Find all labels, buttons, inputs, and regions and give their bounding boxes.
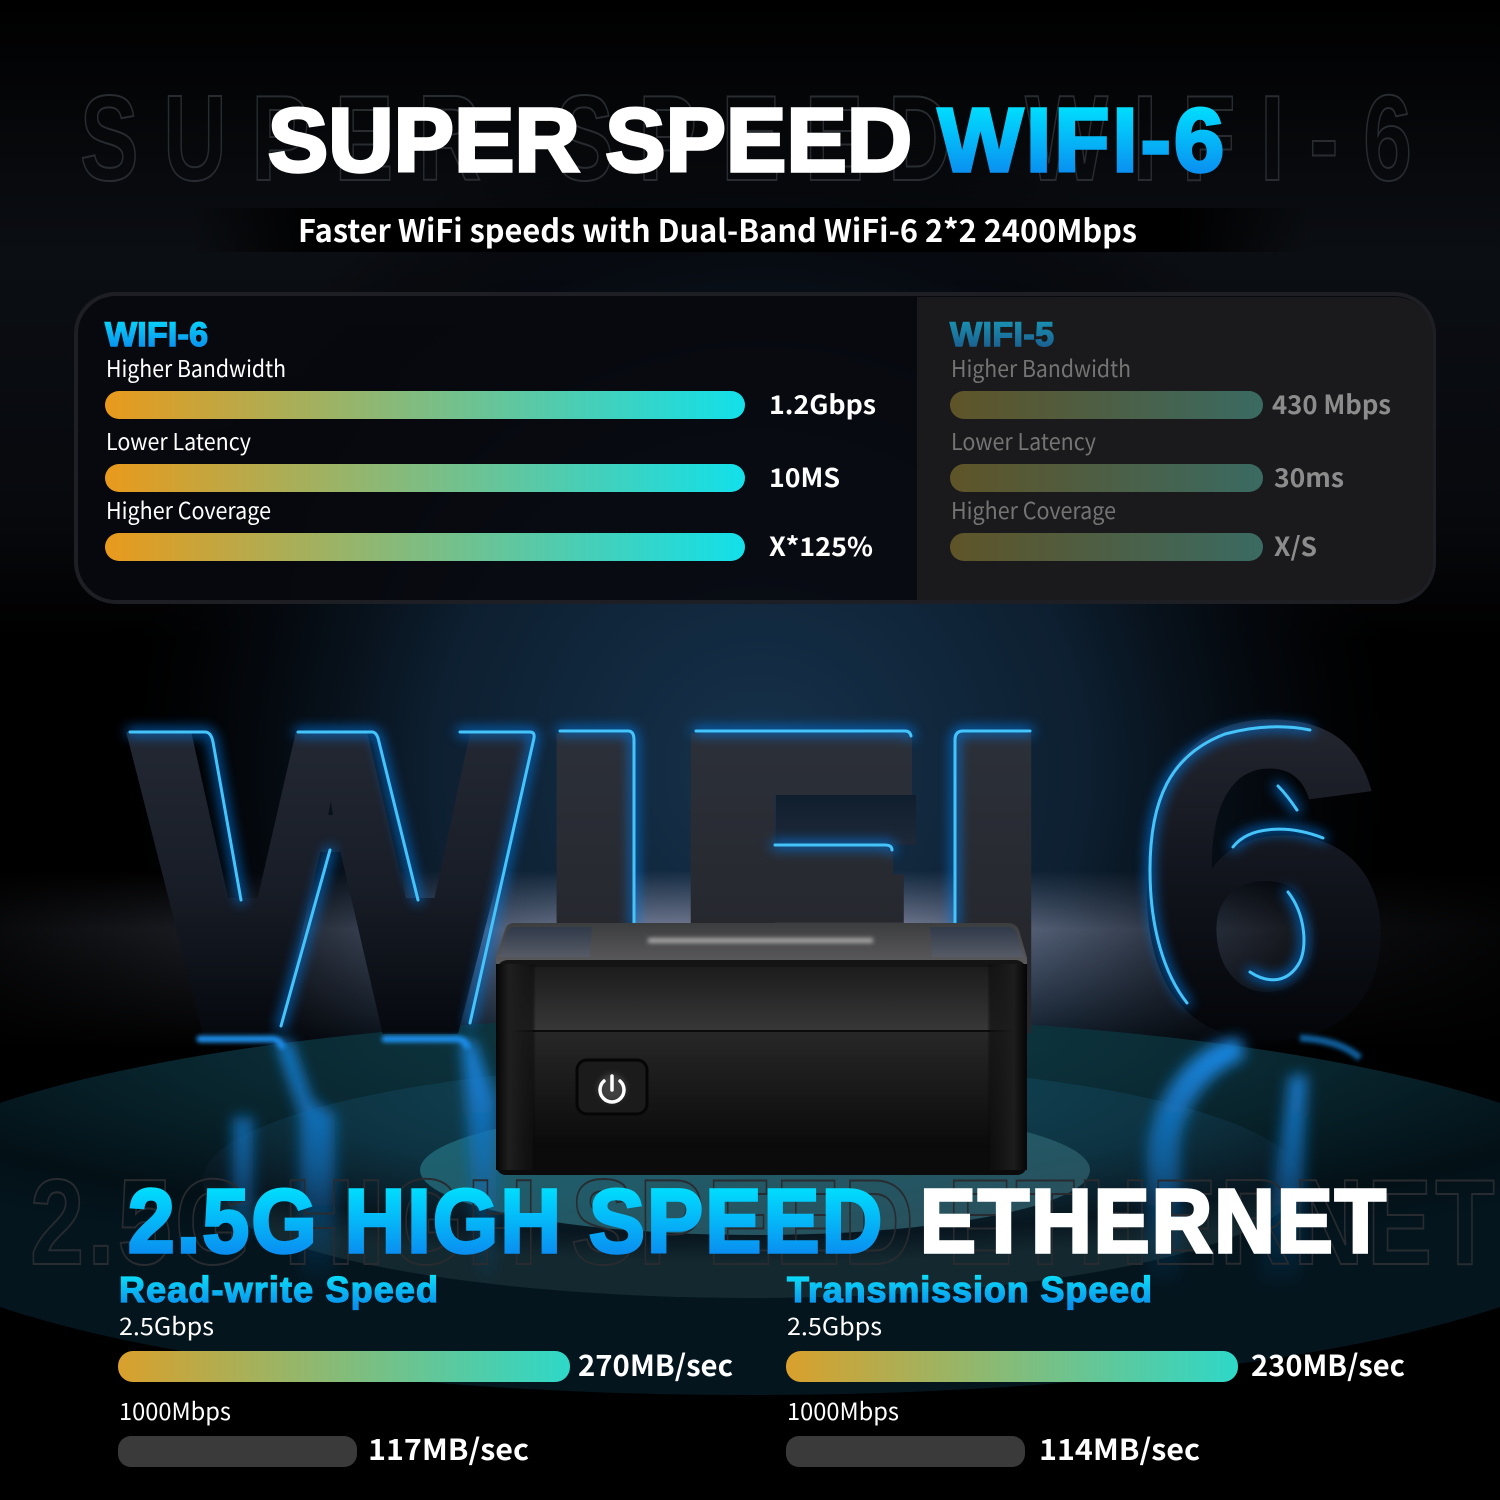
panel: transmission speed: 114MB/sec [1039,1427,1200,1469]
wifi-5 coverage row: Higher Coverage [951,492,1116,526]
panel: wifi comparison [76,294,1434,602]
wifi-5 latency row: 30ms [1274,458,1344,495]
panel: read-write speed [118,1269,733,1469]
neon sign: WIFI 6 letters: 6 [1129,626,1398,1133]
panel: transmission speed: 1000Mbps [787,1392,899,1427]
neon sign: WIFI 6 letters: F [662,638,924,1126]
wifi-5 latency row: Lower Latency [951,423,1096,457]
wifi-6 column [105,316,876,564]
wifi-6 heading: WIFI-6 [105,316,208,354]
coverage row: Higher Coverage [106,492,271,526]
platform rings [0,1015,1500,1395]
panel: read-write speed: 270MB/sec [578,1343,733,1385]
device top face [496,923,1027,966]
panel: read-write speed: 2.5Gbps [119,1307,214,1342]
power button [577,1060,647,1114]
latency row: Lower Latency [106,423,251,457]
panel: read-write speed: 1000Mbps [119,1392,231,1427]
read-write heading: Read-write Speed [119,1269,438,1310]
neon sign: WIFI 6 letters: I [919,639,1067,1126]
wifi-5 heading: WIFI-5 [950,316,1054,354]
wifi-5 coverage row: X/S [1274,527,1317,564]
neon reflections on the platform [200,1038,1360,1290]
upper shell [496,967,1027,1030]
panel: wifi-5 background [917,297,1433,600]
neon sign: WIFI 6 letters [127,626,1398,1133]
background [0,108,1500,1042]
title: 2.5g high speed ethernet: ETHERNET [920,1171,1386,1272]
bandwidth row: Higher Bandwidth [106,350,286,384]
top corner textures [499,927,1024,957]
title: super speed wifi-6 [268,91,1224,191]
F notch cut [776,795,916,882]
wifi-5 bandwidth row [950,350,1391,422]
mini pc device [496,923,1027,1175]
panel: read-write speed: 117MB/sec [368,1427,529,1469]
wifi-5 bandwidth row: Higher Bandwidth [951,350,1131,384]
icon: power [600,1076,624,1102]
panel: transmission speed [786,1269,1405,1469]
lower shell [496,1032,1027,1148]
transmission 2.5g bar [786,1351,1238,1382]
subtitle: Faster WiFi speeds with Dual-Band WiFi-6 2*2 2400Mbps [298,206,1137,251]
read-write 1000m bar [118,1436,357,1467]
title: super speed wifi-6: SUPER SPEED [268,91,912,191]
title: super speed wifi-6: WIFI-6 [938,91,1224,191]
F body bars [693,733,912,925]
latency row: 10MS [769,458,840,495]
ghost title outline: SUPER SPEED WIFI-6 [80,70,1412,206]
transmission 1000m bar [786,1436,1025,1467]
title: 2.5g high speed ethernet: 2.5G HIGH SPEED [128,1171,882,1272]
side shading [496,964,1027,1170]
power glow [598,1074,626,1102]
base [496,1148,1027,1175]
bandwidth row [105,350,876,422]
neon glow edges [130,727,1323,1026]
transmission heading: Transmission Speed [787,1269,1152,1310]
coverage row: X*125% [769,527,873,564]
seam [496,1030,1027,1032]
W body fill [222,815,440,985]
panel: transmission speed: 2.5Gbps [787,1307,882,1342]
wifi-5 column [950,316,1391,564]
device body [496,960,1027,1175]
panel: transmission speed: 230MB/sec [1251,1343,1405,1385]
neon sign: WIFI 6 letters: W [127,638,538,1125]
neon sign: WIFI 6 letters: I [521,639,669,1126]
ghost ethernet outline: 2.5G HIGH SPEED ETHERNET [30,1155,1495,1291]
wifi-5 coverage row [950,492,1317,564]
wifi-5 bandwidth row: 430 Mbps [1272,385,1391,422]
latency row [105,423,840,495]
read-write 2.5g bar [118,1351,570,1382]
blurred logo [648,938,873,943]
coverage row [105,492,873,564]
wifi-5 latency row [950,423,1344,495]
bandwidth row: 1.2Gbps [769,385,876,422]
title: 2.5g high speed ethernet [128,1171,1386,1272]
